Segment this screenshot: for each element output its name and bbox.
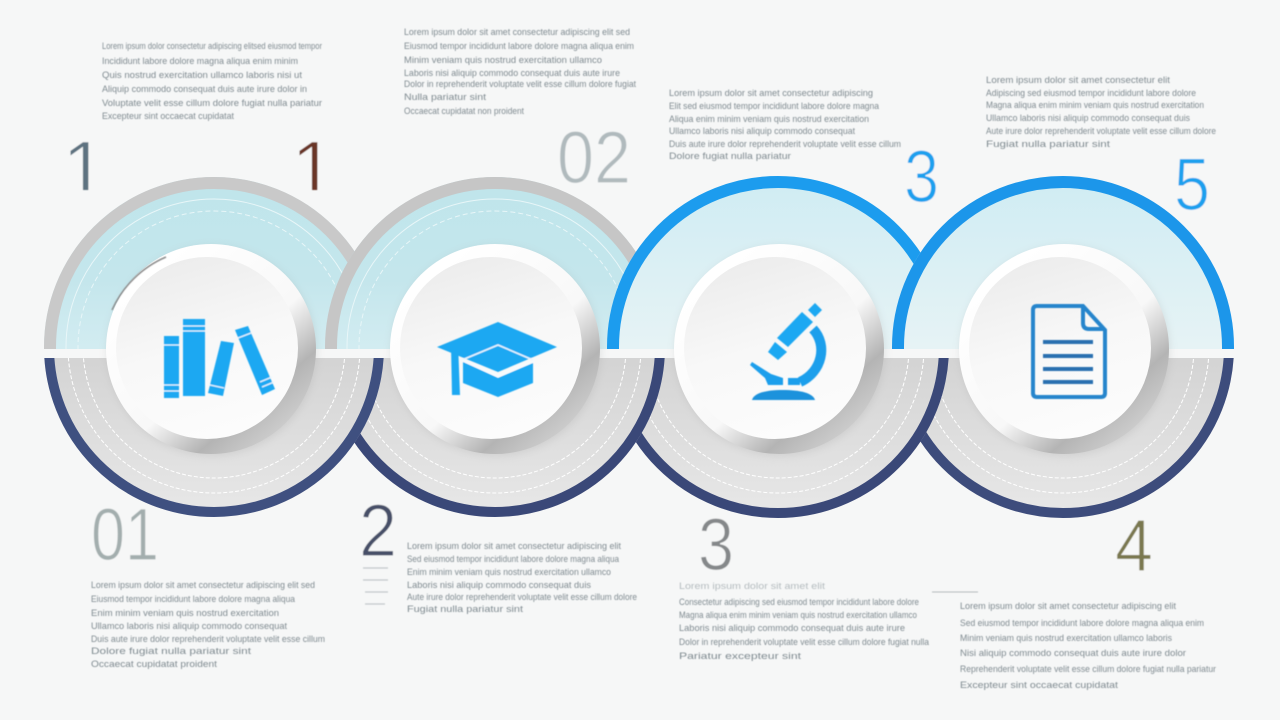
number: top 1: 1	[62, 124, 106, 214]
text block: bottom right: Minim veniam quis nostrud exercitation ullamco laboris	[960, 633, 1172, 644]
text block: top second: Occaecat cupidatat non proident	[404, 106, 524, 117]
text block: bottom right: Reprehenderit voluptate velit esse cillum dolore fugiat nulla pariatur	[960, 664, 1216, 675]
text block: top second	[404, 27, 636, 117]
text block: top right: Ullamco laboris nisi aliquip commodo consequat duis	[986, 113, 1190, 124]
text block: bottom third: Consectetur adipiscing sed eiusmod tempor incididunt labore dolore	[679, 597, 919, 608]
disc and icon: step 2	[390, 244, 601, 456]
text block: bottom left: Lorem ipsum dolor sit amet consectetur adipiscing elit sed	[91, 580, 315, 591]
text block: top second: Lorem ipsum dolor sit amet consectetur adipiscing elit sed	[404, 27, 630, 38]
text block: top third: Aliqua enim minim veniam quis nostrud exercitation	[669, 114, 869, 125]
text block: bottom third: Magna aliqua enim minim veniam quis nostrud exercitation ullamco	[679, 610, 917, 621]
text block: top third: Lorem ipsum dolor sit amet consectetur adipiscing	[669, 88, 873, 99]
text block: bottom right: Excepteur sint occaecat cupidatat	[960, 680, 1118, 691]
text block: top right: Magna aliqua enim minim veniam quis nostrud exercitation	[986, 100, 1204, 111]
text block: bottom right: Sed eiusmod tempor incididunt labore dolore magna aliqua enim	[960, 618, 1204, 629]
number: 01: 01	[91, 493, 159, 576]
text block: top left	[102, 41, 322, 122]
text block: top right: Adipiscing sed eiusmod tempor incididunt labore dolore	[986, 88, 1196, 99]
text block: bottom right: Nisi aliquip commodo consequat duis aute irure dolor	[960, 648, 1186, 659]
text block: top left: Incididunt labore dolore magna aliqua enim minim	[102, 56, 298, 67]
text block: bottom second: Lorem ipsum dolor sit amet consectetur adipiscing elit	[407, 541, 621, 552]
number: blue 5: 5	[1174, 143, 1210, 226]
icon: graduation cap	[437, 322, 557, 397]
text block: top third: Elit sed eiusmod tempor incididunt labore dolore magna	[669, 101, 880, 112]
text block: bottom left: Eiusmod tempor incididunt labore dolore magna aliqua	[91, 594, 296, 605]
text block: bottom second: Aute irure dolor reprehenderit voluptate velit esse cillum dolore	[407, 592, 637, 603]
number: blue 3: 3	[904, 135, 939, 218]
number: 3: 3	[698, 503, 734, 586]
text block: top third: Duis aute irure dolor reprehenderit voluptate velit esse cillum	[669, 139, 901, 150]
text block: bottom left	[91, 580, 325, 670]
text block: top second: Dolor in reprehenderit voluptate velit esse cillum dolore fugiat	[404, 79, 636, 90]
text block: bottom third: Lorem ipsum dolor sit amet elit	[679, 581, 825, 592]
text block: bottom left: Duis aute irure dolor reprehenderit voluptate velit esse cillum	[91, 634, 325, 645]
number: 4: 4	[1115, 504, 1153, 587]
disc and icon: step 4	[959, 244, 1170, 456]
text block: top right: Fugiat nulla pariatur sint	[986, 139, 1110, 150]
text block: top left: Aliquip commodo consequat duis aute irure dolor in	[102, 84, 307, 95]
text block: top left: Voluptate velit esse cillum dolore fugiat nulla pariatur	[102, 98, 322, 109]
text block: top second: Minim veniam quis nostrud exercitation ullamco	[404, 55, 602, 66]
numbers	[62, 116, 1210, 587]
icon: microscope	[750, 303, 822, 400]
text block: bottom third: Laboris nisi aliquip commodo consequat duis aute irure	[679, 623, 905, 634]
text block: top left: Excepteur sint occaecat cupidatat	[102, 111, 234, 122]
text block: top second: Laboris nisi aliquip commodo consequat duis aute irure	[404, 68, 620, 79]
number: 2: 2	[359, 489, 397, 572]
text block: top left: Lorem ipsum dolor consectetur adipiscing elitsed eiusmod tempor	[102, 41, 322, 52]
text block: bottom right: Lorem ipsum dolor sit amet consectetur adipiscing elit	[960, 601, 1176, 612]
text block: top third	[669, 88, 901, 162]
text block: top right: Lorem ipsum dolor sit amet consectetur elit	[986, 75, 1170, 86]
text block: top second: Eiusmod tempor incididunt labore dolore magna aliqua enim	[404, 41, 634, 52]
text block: bottom third: Pariatur excepteur sint	[679, 651, 801, 662]
disc and icon: step 3	[674, 244, 885, 456]
text block: bottom left: Ullamco laboris nisi aliquip commodo consequat	[91, 621, 287, 632]
small rule lines beside number 2	[363, 568, 388, 604]
text block: bottom third	[679, 581, 930, 662]
text block: bottom second: Enim minim veniam quis nostrud exercitation ullamco	[407, 567, 611, 578]
text block: top third: Dolore fugiat nulla pariatur	[669, 151, 791, 162]
text block: bottom left: Enim minim veniam quis nostrud exercitation	[91, 608, 279, 619]
text block: bottom left: Occaecat cupidatat proident	[91, 659, 217, 670]
text block: bottom second: Sed eiusmod tempor incididunt labore dolore magna aliqua	[407, 554, 620, 565]
text block: bottom second	[407, 541, 637, 615]
lower half arcs: steps 4 to 1	[44, 358, 1234, 518]
text block: bottom third: Dolor in reprehenderit voluptate velit esse cillum dolore fugiat nulla	[679, 637, 930, 648]
disc and icon: step 1	[106, 244, 317, 456]
text block: top right: Aute irure dolor reprehenderit voluptate velit esse cillum dolore	[986, 126, 1216, 137]
number: 02: 02	[557, 116, 631, 199]
upper half arcs: steps 1 to 4	[44, 176, 1234, 349]
text block: top second: Nulla pariatur sint	[404, 92, 486, 103]
text block: bottom second: Fugiat nulla pariatur sint	[407, 604, 523, 615]
text block: bottom left: Dolore fugiat nulla pariatur sint	[91, 646, 251, 657]
text block: top third: Ullamco laboris nisi aliquip commodo consequat	[669, 126, 855, 137]
text block: top right	[986, 75, 1216, 150]
text block: bottom second: Laboris nisi aliquip commodo consequat duis	[407, 580, 591, 591]
icon: document	[1033, 306, 1105, 397]
text block: top left: Quis nostrud exercitation ullamco laboris nisi ut	[102, 70, 302, 81]
text block: bottom right	[932, 592, 1216, 691]
number: top 1 brown: 1	[291, 124, 336, 214]
icon: books	[164, 319, 275, 398]
